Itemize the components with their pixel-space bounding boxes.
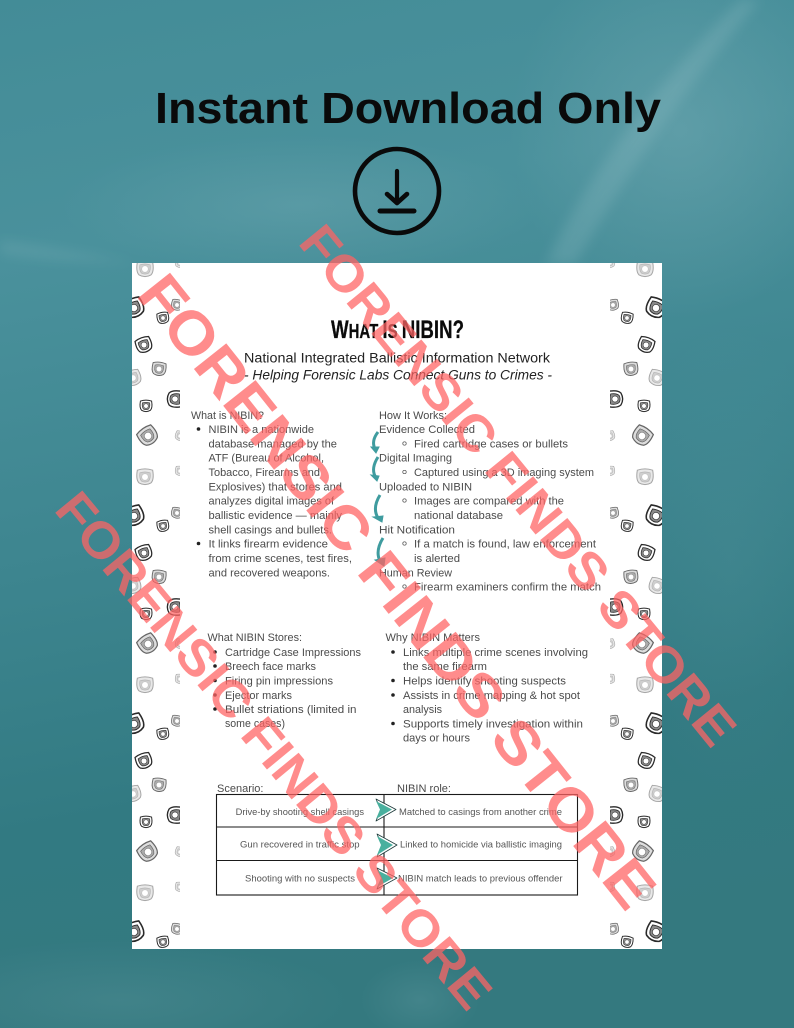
watermark: upper diagonal: FORENSIC FINDS STORE <box>288 214 747 757</box>
text block: What NIBIN Stores <box>208 632 361 730</box>
text block: What is NIBIN?: What is NIBIN? <box>191 410 264 422</box>
icon: curved teal step arrows <box>371 432 385 566</box>
text block: What is NIBIN?: Explosives) that stores and <box>208 481 342 493</box>
table: scenario and NIBIN role <box>216 783 578 895</box>
text block: How It Works: national database <box>414 510 503 522</box>
heading: Instant Download Only: Instant Download Only <box>155 84 662 133</box>
text block: How It Works: Evidence Collected <box>379 424 475 436</box>
panel: white worksheet page <box>132 263 662 949</box>
text block: How It Works: is alerted <box>414 553 460 565</box>
text block: What NIBIN Stores: Ejector marks <box>225 690 292 702</box>
text block: How It Works: Firearm examiners confirm the match <box>414 582 601 594</box>
text block: Why NIBIN Matters: Why NIBIN Matters <box>386 632 481 644</box>
text block: How It Works: How It Works: <box>379 410 447 422</box>
table: scenario and NIBIN role: Shooting with no suspects <box>245 874 355 884</box>
text block: Why NIBIN Matters: the same firearm <box>403 661 487 673</box>
text block: What is NIBIN?: ATF (Bureau of Alcohol, <box>208 453 324 465</box>
text block: What NIBIN Stores: Bullet striations (limited in <box>225 704 356 716</box>
table: scenario and NIBIN role: Gun recovered in traffic stop <box>240 840 360 850</box>
watermark: middle diagonal: FORENSIC FINDS STORE <box>125 261 669 921</box>
text block: Why NIBIN Matters: Links multiple crime scenes involving <box>403 647 588 659</box>
subtitle: - Helping Forensic Labs Connect Guns to Crimes - <box>244 368 553 382</box>
text block: Why NIBIN Matters: analysis <box>403 704 442 716</box>
text block: How It Works: Uploaded to NIBIN <box>379 481 472 493</box>
icon: row chevrons <box>376 799 397 889</box>
text block: What is NIBIN?: It links firearm evidence <box>208 539 328 551</box>
text block: How It Works: Digital Imaging <box>379 453 452 465</box>
text block: Why NIBIN Matters: days or hours <box>403 732 470 744</box>
left cartridge pattern strip <box>132 263 180 948</box>
text block: How It Works: Images are compared with the <box>414 496 564 508</box>
text block: What is NIBIN?: analyzes digital images of <box>208 496 335 508</box>
text block: How It Works: Fired cartridge cases or bullets <box>414 438 569 450</box>
text block: What NIBIN Stores: Breech face marks <box>225 661 316 673</box>
table: scenario and NIBIN role: NIBIN match leads to previous offender <box>398 874 562 884</box>
table: scenario and NIBIN role: Linked to homicide via ballistic imaging <box>400 840 562 850</box>
text block: How It Works: Human Review <box>379 567 452 579</box>
table: scenario and NIBIN role: Scenario: <box>217 783 264 795</box>
text block: Why NIBIN Matters: Assists in crime mapping & hot spot <box>403 690 580 702</box>
subtitle <box>244 350 553 382</box>
subtitle: National Integrated Ballistic Information Network <box>244 350 550 366</box>
text block: How It Works: Hit Notification <box>379 524 455 536</box>
text block: What is NIBIN?: and recovered weapons. <box>208 567 330 579</box>
text block: Why NIBIN Matters: Supports timely investigation within <box>403 718 583 730</box>
text block: How It Works: If a match is found, law enforcement <box>414 539 596 551</box>
text block: What NIBIN Stores: What NIBIN Stores: <box>208 632 302 644</box>
text block: Why NIBIN Matters <box>386 632 588 744</box>
text block: What is NIBIN? <box>191 410 352 579</box>
right cartridge pattern strip <box>610 263 662 948</box>
table: scenario and NIBIN role: Matched to casings from another crime <box>399 807 562 818</box>
text block: What is NIBIN?: NIBIN is a nationwide <box>208 424 314 436</box>
text block: What is NIBIN?: from crime scenes, test fires, <box>208 553 352 565</box>
text block: What NIBIN Stores: Cartridge Case Impressions <box>225 647 361 659</box>
icon: download circle <box>355 149 439 233</box>
title: What is NIBIN?: WHAT IS NIBIN? <box>331 316 464 344</box>
text block: What NIBIN Stores: Firing pin impressions <box>225 676 334 688</box>
text block: How It Works <box>379 410 601 594</box>
table: scenario and NIBIN role: NIBIN role: <box>397 783 451 795</box>
text block: What is NIBIN?: ballistic evidence — mainly <box>208 510 342 522</box>
text block: What is NIBIN?: Tobacco, Firearms and <box>208 467 320 479</box>
text block: What NIBIN Stores: some cases) <box>225 718 285 730</box>
text block: What is NIBIN?: database managed by the <box>208 438 337 450</box>
text block: Why NIBIN Matters: Helps identify shooting suspects <box>403 676 567 688</box>
table: scenario and NIBIN role: Drive-by shooting shell casings <box>236 807 364 818</box>
text block: How It Works: Captured using a 3D imaging system <box>414 467 594 479</box>
text block: What is NIBIN?: shell casings and bullets. <box>208 524 332 536</box>
watermark: lower diagonal: FORENSIC FINDS STORE <box>45 481 503 1020</box>
